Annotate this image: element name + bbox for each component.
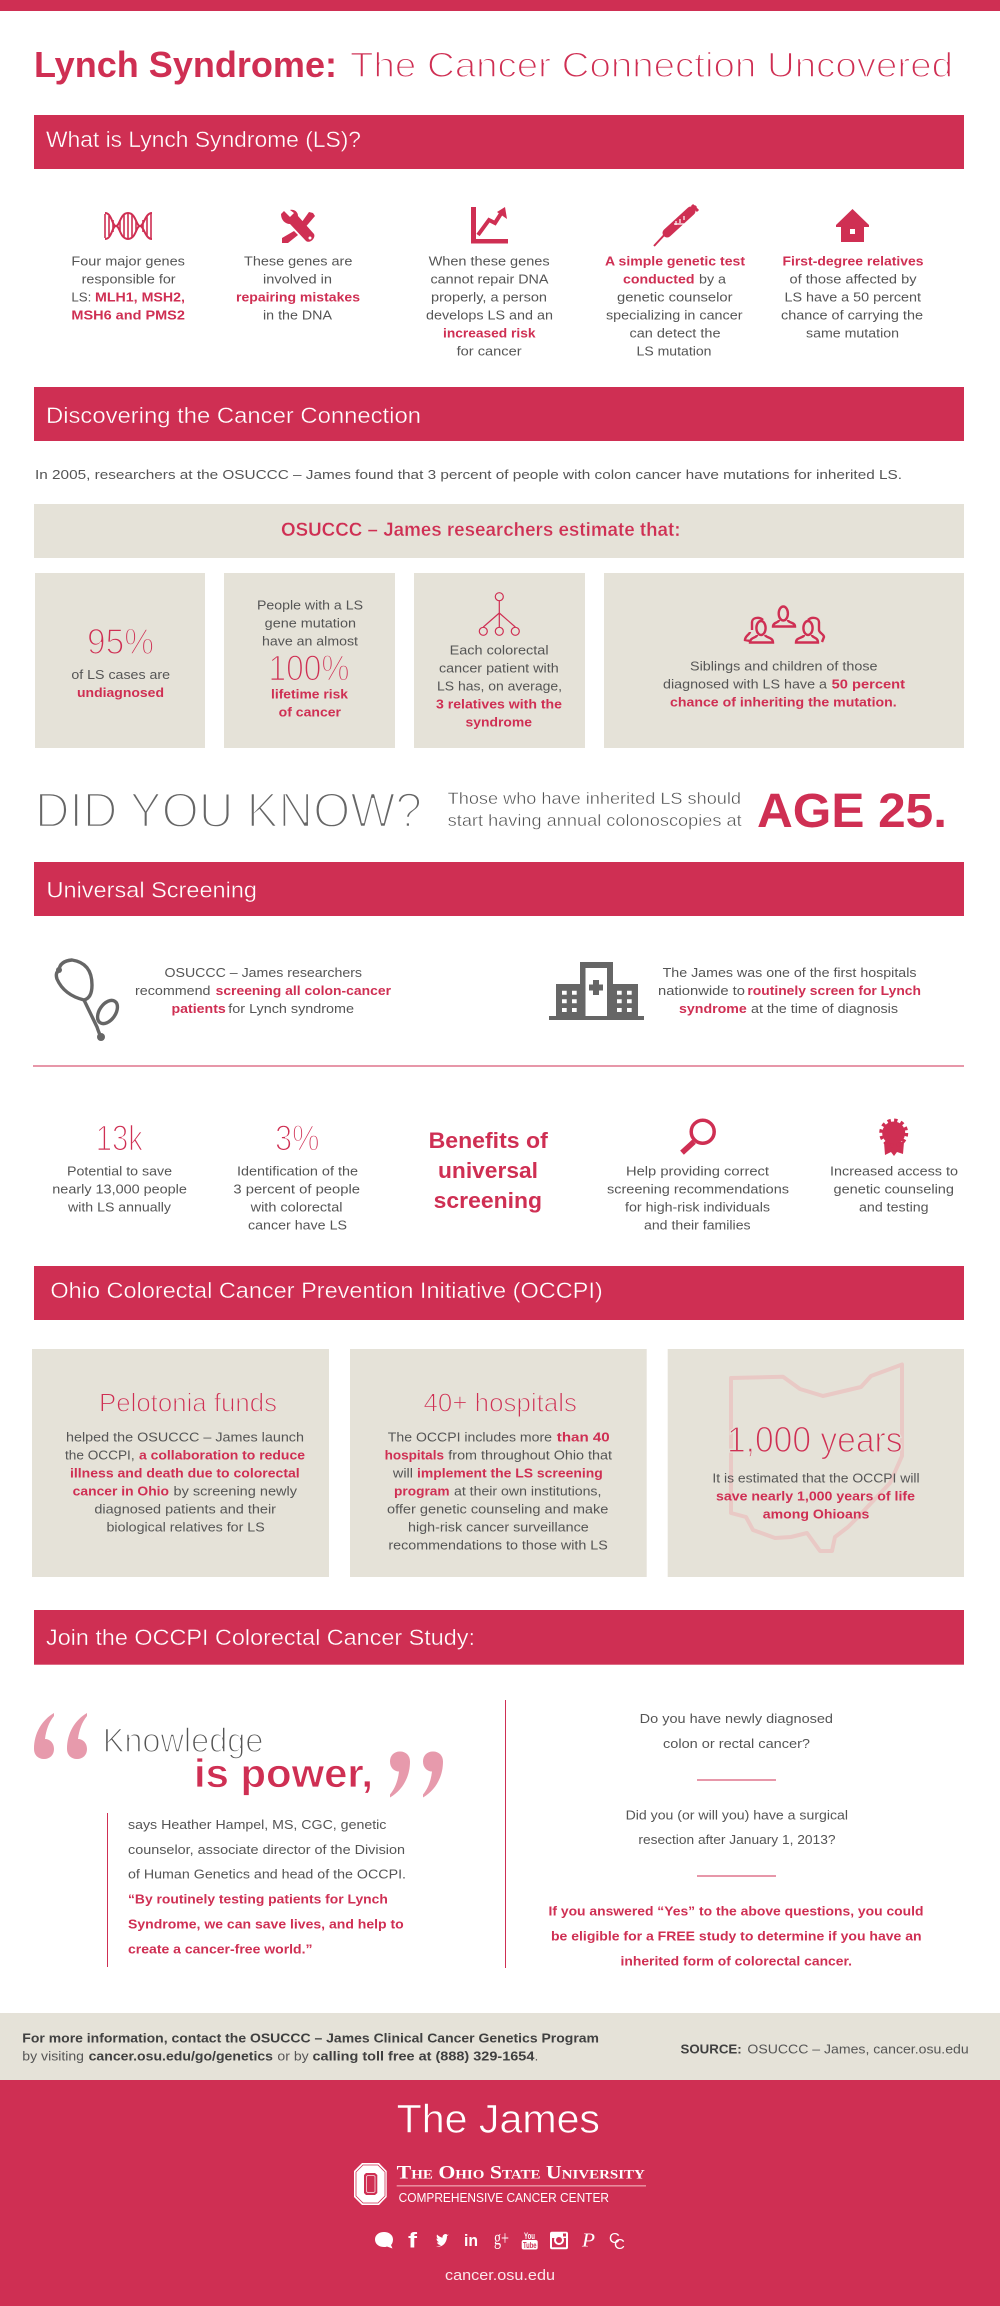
card: 40+ hospitals: from throughout Ohio that bbox=[448, 1448, 612, 1463]
text: four major genes bbox=[71, 254, 185, 323]
footer: contact information band: cancer.osu.edu/go/genetics bbox=[89, 2049, 273, 2064]
icon: youtube: You bbox=[524, 2231, 535, 2241]
card: 100 percent lifetime risk bbox=[224, 573, 395, 748]
card: 40+ hospitals: recommendations to those with LS bbox=[388, 1538, 608, 1553]
text: eligibility questions: Did you (or will you) have a surgical bbox=[626, 1808, 848, 1823]
title bbox=[34, 44, 953, 85]
icon: house bbox=[836, 209, 869, 242]
text: quote attribution: says Heather Hampel, MS, CGC, genetic bbox=[128, 1817, 387, 1832]
heading: OCCPI: Ohio Colorectal Cancer Prevention Initiative (OCCPI) bbox=[50, 1278, 603, 1303]
heading: universal screening bbox=[34, 862, 964, 916]
text: first-degree relatives: same mutation bbox=[806, 326, 899, 341]
brand name: The James bbox=[397, 2097, 600, 2141]
card: 1,000 years: 1,000 years bbox=[727, 1419, 902, 1460]
text: when genes cannot repair bbox=[426, 254, 553, 359]
card: three relatives: syndrome bbox=[466, 715, 532, 730]
text: screening all patients: screening all colon-cancer bbox=[216, 983, 391, 998]
text: quote attribution: create a cancer-free world.” bbox=[128, 1942, 312, 1957]
icon: CC mark bbox=[609, 2230, 625, 2253]
footer: contact information band: SOURCE: bbox=[680, 2042, 742, 2057]
text: eligibility questions: Do you have newly diagnosed bbox=[640, 1711, 833, 1726]
callout: did you know bbox=[35, 784, 947, 838]
heading: discovering the cancer connection: Discovering the Cancer Connection bbox=[46, 403, 421, 428]
benefit: 3 percent: 3% bbox=[275, 1118, 320, 1159]
heading: what is Lynch Syndrome bbox=[34, 115, 964, 169]
footer: contact information band: . bbox=[535, 2049, 538, 2064]
benefit: 3 percent: Identification of the bbox=[237, 1164, 358, 1179]
text: eligibility questions: resection after January 1, 2013? bbox=[638, 1832, 836, 1847]
icon: wrench and screwdriver bbox=[281, 210, 315, 243]
card: 40+ hospitals: The OCCPI includes more bbox=[388, 1430, 552, 1445]
card: 40+ hospitals: high-risk cancer surveillance bbox=[408, 1520, 589, 1535]
footer: red brand block bbox=[0, 2080, 1000, 2306]
icon: magnifying glass bbox=[682, 1120, 714, 1153]
text: genes repair mistakes: involved in bbox=[263, 272, 332, 287]
text: when genes cannot repair: When these genes bbox=[429, 254, 550, 269]
card: 100 percent lifetime risk: gene mutation bbox=[265, 616, 356, 630]
footer: contact information band: by visiting bbox=[22, 2049, 84, 2064]
footer: contact information band: For more information, contact the OSUCCC – James Clinical Cancer Genetics Program bbox=[22, 2031, 599, 2046]
icon: pinterest: P bbox=[581, 2230, 595, 2252]
icon: facebook: f bbox=[408, 2230, 418, 2252]
card: Pelotonia funds bbox=[32, 1349, 329, 1577]
card: siblings and children: 50 percent bbox=[832, 677, 906, 692]
callout: did you know: start having annual colonoscopies at bbox=[448, 811, 742, 830]
card: 100 percent lifetime risk: of cancer bbox=[279, 705, 341, 720]
heading: discovering the cancer connection bbox=[34, 387, 964, 441]
intro text: In 2005, researchers at the OSUCCC – James found that 3 percent of people with colon cancer have mutations for inherited LS. bbox=[35, 467, 902, 482]
card: 100 percent lifetime risk: lifetime risk bbox=[271, 687, 349, 702]
text: screening all patients: OSUCCC – James researchers bbox=[164, 965, 363, 980]
heading: benefits of universal screening bbox=[429, 1128, 548, 1213]
website address: cancer.osu.edu bbox=[445, 2267, 555, 2284]
card: 40+ hospitals: than 40 bbox=[557, 1430, 610, 1445]
text: when genes cannot repair: for cancer bbox=[457, 344, 522, 359]
benefit: increased access bbox=[830, 1120, 958, 1215]
panel: Ohio Colorectal Cancer Prevention Initiative bbox=[32, 1266, 964, 1577]
card: Pelotonia funds: by screening newly bbox=[174, 1484, 298, 1499]
card: siblings and children: chance of inheriting the mutation. bbox=[670, 695, 897, 710]
card: three relatives bbox=[414, 573, 585, 748]
footer: contact information band: calling toll free at (888) 329-1654 bbox=[312, 2049, 535, 2064]
card: 1,000 years: among Ohioans bbox=[763, 1507, 869, 1522]
text: simple genetic test: specializing in cancer bbox=[606, 308, 743, 323]
text: eligibility questions: If you answered “Yes” to the above questions, you could bbox=[548, 1903, 924, 1918]
text: genes repair mistakes: repairing mistakes bbox=[236, 290, 360, 305]
text: screening all patients: patients bbox=[172, 1001, 226, 1016]
benefit: correct recommendations: for high-risk individuals bbox=[625, 1200, 771, 1215]
callout: did you know: AGE 25. bbox=[757, 785, 947, 838]
panel: universal screening bbox=[33, 862, 964, 1233]
logo: university name bbox=[397, 2163, 646, 2205]
text: four major genes: MSH6 and PMS2 bbox=[71, 308, 185, 323]
text: simple genetic test bbox=[605, 254, 746, 359]
text: first-degree relatives: LS have a 50 percent bbox=[784, 290, 921, 305]
logo: university name: COMPREHENSIVE CANCER CENTER bbox=[399, 2190, 609, 2205]
heading: universal screening: Universal Screening bbox=[46, 878, 257, 903]
card: 40+ hospitals: at their own institutions, bbox=[454, 1484, 601, 1499]
heading: benefits of universal screening: Benefits of bbox=[429, 1128, 548, 1153]
card: 40+ hospitals: 40+ hospitals bbox=[424, 1388, 577, 1418]
text: four major genes: LS: bbox=[71, 290, 91, 305]
panel: join the OCCPI study bbox=[34, 1610, 964, 1968]
heading: join the study bbox=[34, 1610, 964, 1665]
card: Pelotonia funds: cancer in Ohio bbox=[73, 1484, 169, 1499]
text: first hospitals to screen: routinely screen for Lynch bbox=[747, 983, 921, 998]
heading: OCCPI bbox=[34, 1266, 964, 1320]
icon: youtube bbox=[522, 2231, 538, 2250]
benefit: 3 percent: cancer have LS bbox=[248, 1218, 347, 1233]
card: Pelotonia funds: the OCCPI, bbox=[65, 1448, 135, 1463]
text: first-degree relatives: First-degree relatives bbox=[782, 254, 924, 269]
text: when genes cannot repair: cannot repair DNA bbox=[430, 272, 549, 287]
icon: award rosette bbox=[881, 1120, 906, 1156]
card: three relatives: 3 relatives with the bbox=[436, 697, 562, 712]
icon: stethoscope bbox=[56, 960, 122, 1041]
icon: CC mark: C bbox=[614, 2236, 625, 2253]
card: three relatives: Each colorectal bbox=[450, 643, 549, 658]
benefit: correct recommendations: Help providing correct bbox=[626, 1164, 769, 1179]
card: 100 percent lifetime risk: People with a LS bbox=[257, 598, 363, 612]
callout: did you know: DID YOU KNOW? bbox=[35, 784, 422, 838]
text: genes repair mistakes: These genes are bbox=[244, 254, 352, 269]
card: Pelotonia funds: biological relatives for LS bbox=[106, 1520, 265, 1535]
card: 95 percent undiagnosed: of LS cases are bbox=[71, 667, 170, 682]
text: when genes cannot repair: increased risk bbox=[443, 326, 536, 341]
card: siblings and children: Siblings and children of those bbox=[690, 659, 878, 674]
card: 100 percent lifetime risk: have an almost bbox=[262, 634, 358, 648]
text: quote attribution: “By routinely testing patients for Lynch bbox=[128, 1892, 388, 1907]
text: quote attribution: counselor, associate director of the Division bbox=[128, 1842, 405, 1857]
benefit: increased access: and testing bbox=[859, 1200, 929, 1215]
icon: youtube: Tube bbox=[523, 2241, 537, 2250]
text: when genes cannot repair: properly, a person bbox=[431, 290, 547, 305]
card: 1,000 years bbox=[668, 1349, 964, 1577]
card: 40+ hospitals: will bbox=[392, 1466, 413, 1481]
text: first hospitals to screen: at the time of diagnosis bbox=[751, 1001, 899, 1016]
icon: CC mark: C bbox=[609, 2230, 620, 2247]
text: screening all patients: for Lynch syndrome bbox=[228, 1001, 354, 1016]
card: three relatives: LS has, on average, bbox=[437, 679, 562, 694]
card: 1,000 years: It is estimated that the OCCPI will bbox=[712, 1471, 920, 1486]
benefit: 13k: with LS annually bbox=[67, 1200, 172, 1215]
icon: DNA helix bbox=[105, 213, 152, 239]
heading: what is Lynch Syndrome: What is Lynch Syndrome (LS)? bbox=[46, 127, 361, 152]
text: first-degree relatives: chance of carrying the bbox=[781, 308, 923, 323]
title: Lynch Syndrome: bbox=[34, 44, 337, 85]
text: simple genetic test: can detect the bbox=[630, 326, 720, 341]
benefit: correct recommendations: and their families bbox=[644, 1218, 751, 1233]
card: Pelotonia funds: Pelotonia funds bbox=[99, 1388, 277, 1418]
icon: syringe bbox=[654, 205, 698, 246]
text: first hospitals to screen bbox=[658, 965, 921, 1016]
benefit: 13k: Potential to save bbox=[67, 1164, 172, 1179]
text: eligibility questions: inherited form of colorectal cancer. bbox=[620, 1953, 852, 1968]
title: The Cancer Connection Uncovered bbox=[350, 46, 953, 85]
text: four major genes: responsible for bbox=[82, 272, 176, 287]
quote headline: Knowledge bbox=[103, 1722, 263, 1760]
text: simple genetic test: by a bbox=[699, 272, 727, 287]
benefit: 3 percent bbox=[233, 1118, 360, 1233]
card: Pelotonia funds: illness and death due to colorectal bbox=[70, 1466, 300, 1481]
icon: google plus: g+ bbox=[494, 2228, 509, 2250]
card: 95 percent undiagnosed: undiagnosed bbox=[77, 685, 164, 700]
icon: linkedin: in bbox=[464, 2231, 478, 2250]
text: eligibility questions: colon or rectal cancer? bbox=[663, 1736, 810, 1751]
benefit: increased access: genetic counseling bbox=[834, 1182, 954, 1197]
text: four major genes: MLH1, MSH2, bbox=[95, 290, 185, 305]
card: Pelotonia funds: diagnosed patients and their bbox=[94, 1502, 277, 1517]
icon: closing quotation mark bbox=[390, 1752, 443, 1798]
card: 1,000 years: save nearly 1,000 years of life bbox=[716, 1489, 915, 1504]
text: first-degree relatives: of those affected by bbox=[790, 272, 917, 287]
banner: researchers estimate bbox=[34, 504, 964, 558]
text: eligibility questions: be eligible for a FREE study to determine if you have an bbox=[551, 1929, 922, 1944]
callout: did you know: Those who have inherited LS should bbox=[448, 789, 741, 808]
card: 40+ hospitals bbox=[350, 1349, 647, 1577]
card: siblings and children: diagnosed with LS have a bbox=[663, 677, 828, 692]
benefit: 13k: nearly 13,000 people bbox=[52, 1182, 187, 1197]
text: simple genetic test: A simple genetic test bbox=[605, 254, 746, 269]
text: quote attribution bbox=[128, 1817, 406, 1957]
panel: what is Lynch Syndrome bbox=[34, 115, 964, 359]
icon: chat bubble bbox=[375, 2232, 393, 2248]
benefit: correct recommendations: screening recommendations bbox=[607, 1182, 790, 1197]
text: four major genes: Four major genes bbox=[71, 254, 185, 269]
card: Pelotonia funds: helped the OSUCCC – James launch bbox=[66, 1430, 304, 1445]
card: 40+ hospitals: implement the LS screening bbox=[417, 1466, 603, 1481]
quote headline bbox=[103, 1722, 373, 1796]
text: when genes cannot repair: develops LS and an bbox=[426, 308, 553, 323]
card: Pelotonia funds: a collaboration to reduce bbox=[139, 1448, 305, 1463]
logo: block O bbox=[354, 2163, 387, 2205]
card: 95 percent undiagnosed bbox=[35, 573, 205, 748]
text: screening all patients: recommend bbox=[135, 983, 210, 998]
benefit: 13k: 13k bbox=[96, 1118, 144, 1159]
benefit: 3 percent: with colorectal bbox=[249, 1200, 343, 1215]
text: first hospitals to screen: nationwide to bbox=[658, 983, 745, 998]
card: siblings and children bbox=[604, 573, 964, 748]
card: 40+ hospitals: program bbox=[394, 1484, 450, 1499]
icon: opening quotation mark bbox=[34, 1713, 87, 1759]
icon: rising chart bbox=[471, 207, 508, 244]
panel: discovering the cancer connection bbox=[34, 387, 964, 748]
icon: twitter bbox=[436, 2234, 449, 2247]
text: quote attribution: of Human Genetics and head of the OCCPI. bbox=[128, 1867, 406, 1882]
heading: benefits of universal screening: universal bbox=[438, 1158, 538, 1183]
text: simple genetic test: conducted bbox=[623, 272, 695, 287]
card: 40+ hospitals: hospitals bbox=[385, 1448, 444, 1463]
banner: researchers estimate: OSUCCC – James researchers estimate that: bbox=[281, 520, 680, 541]
logo: university name: The Ohio State University bbox=[397, 2163, 645, 2184]
footer: contact information band: OSUCCC – James, cancer.osu.edu bbox=[747, 2042, 969, 2057]
benefit: 13k bbox=[52, 1118, 187, 1215]
card: 100 percent lifetime risk: 100% bbox=[268, 648, 350, 689]
heading: benefits of universal screening: screening bbox=[434, 1188, 542, 1213]
text: simple genetic test: genetic counselor bbox=[617, 290, 733, 305]
heading: join the study: Join the OCCPI Colorectal Cancer Study: bbox=[46, 1625, 475, 1650]
text: simple genetic test: LS mutation bbox=[636, 344, 712, 359]
footer: contact information band: or by bbox=[277, 2049, 309, 2064]
card: 40+ hospitals: offer genetic counseling and make bbox=[387, 1502, 608, 1517]
benefit: increased access: Increased access to bbox=[830, 1164, 958, 1179]
footer: contact information band bbox=[0, 2013, 1000, 2080]
text: first hospitals to screen: syndrome bbox=[679, 1001, 747, 1016]
card: 95 percent undiagnosed: 95% bbox=[87, 621, 154, 662]
text: quote attribution: Syndrome, we can save lives, and help to bbox=[128, 1917, 404, 1932]
text: eligibility questions bbox=[548, 1711, 924, 1968]
text: screening all patients bbox=[135, 965, 391, 1016]
text: genes repair mistakes: in the DNA bbox=[263, 308, 332, 323]
card: three relatives: cancer patient with bbox=[439, 661, 559, 676]
quote headline: is power, bbox=[194, 1752, 373, 1796]
social media icons bbox=[375, 2228, 625, 2253]
benefit: correct recommendations bbox=[607, 1120, 790, 1233]
map: Ohio outline bbox=[731, 1364, 902, 1551]
icon: instagram bbox=[550, 2232, 568, 2249]
benefit: 3 percent: 3 percent of people bbox=[233, 1182, 360, 1197]
icon: family tree bbox=[479, 593, 519, 635]
text: first hospitals to screen: The James was one of the first hospitals bbox=[663, 965, 917, 980]
text: genes repair mistakes bbox=[236, 254, 360, 323]
icon: hospital building bbox=[549, 962, 644, 1020]
text: first-degree relatives bbox=[781, 254, 924, 341]
icon: group of people bbox=[745, 606, 824, 642]
